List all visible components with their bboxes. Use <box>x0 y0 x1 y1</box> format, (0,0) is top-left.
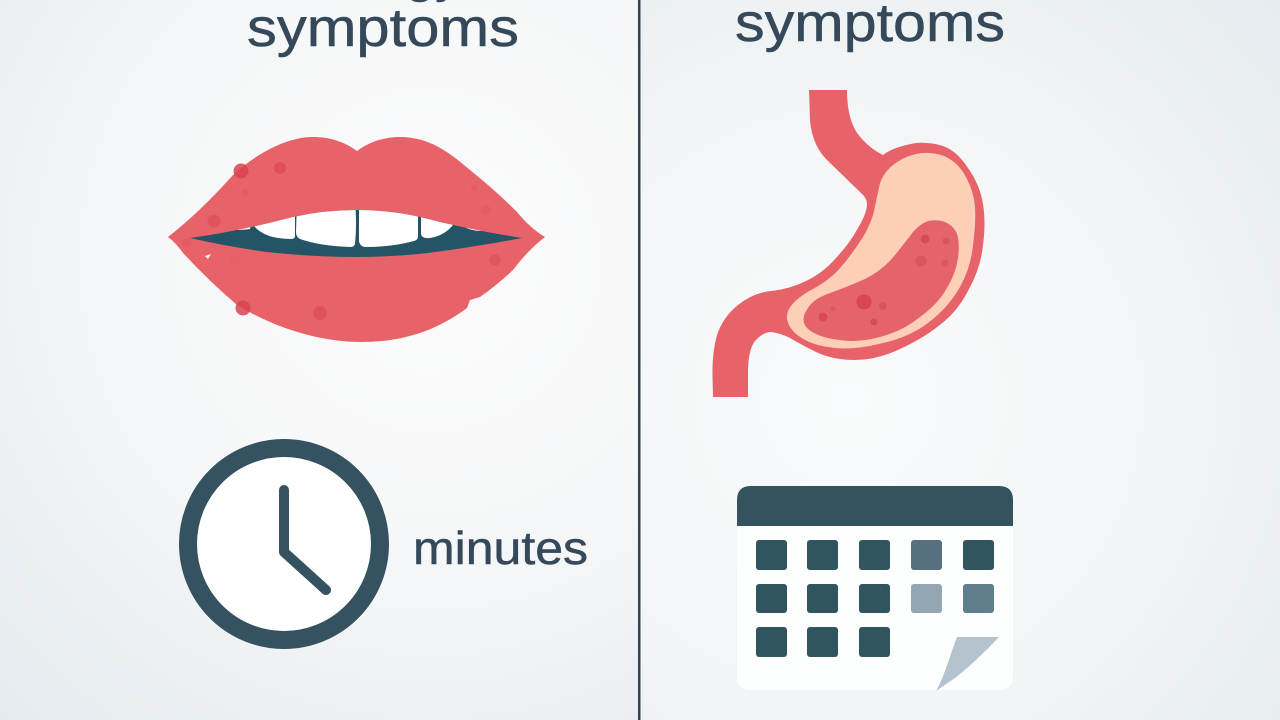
icon: lips with spots <box>168 137 545 342</box>
upper and lower lip <box>168 137 545 342</box>
icon: clock <box>188 448 380 640</box>
icon: stomach <box>712 90 984 397</box>
clock hands <box>284 490 326 590</box>
teeth <box>237 210 482 247</box>
center divider <box>638 0 640 720</box>
spots <box>182 162 500 320</box>
mouth opening <box>190 210 522 257</box>
clock face <box>188 448 380 640</box>
panel: right background <box>639 0 1280 720</box>
icon: calendar <box>737 486 1013 691</box>
stomach outer wall <box>712 90 984 397</box>
panel: left background <box>0 0 639 720</box>
calendar page <box>737 500 1013 690</box>
calendar header <box>737 486 1013 526</box>
label: minutes: minutes <box>413 522 588 574</box>
day squares <box>756 540 994 657</box>
inflamed inner area <box>804 220 959 341</box>
inflammation spots <box>818 234 950 326</box>
peach lining <box>787 153 975 348</box>
page curl <box>936 637 999 691</box>
